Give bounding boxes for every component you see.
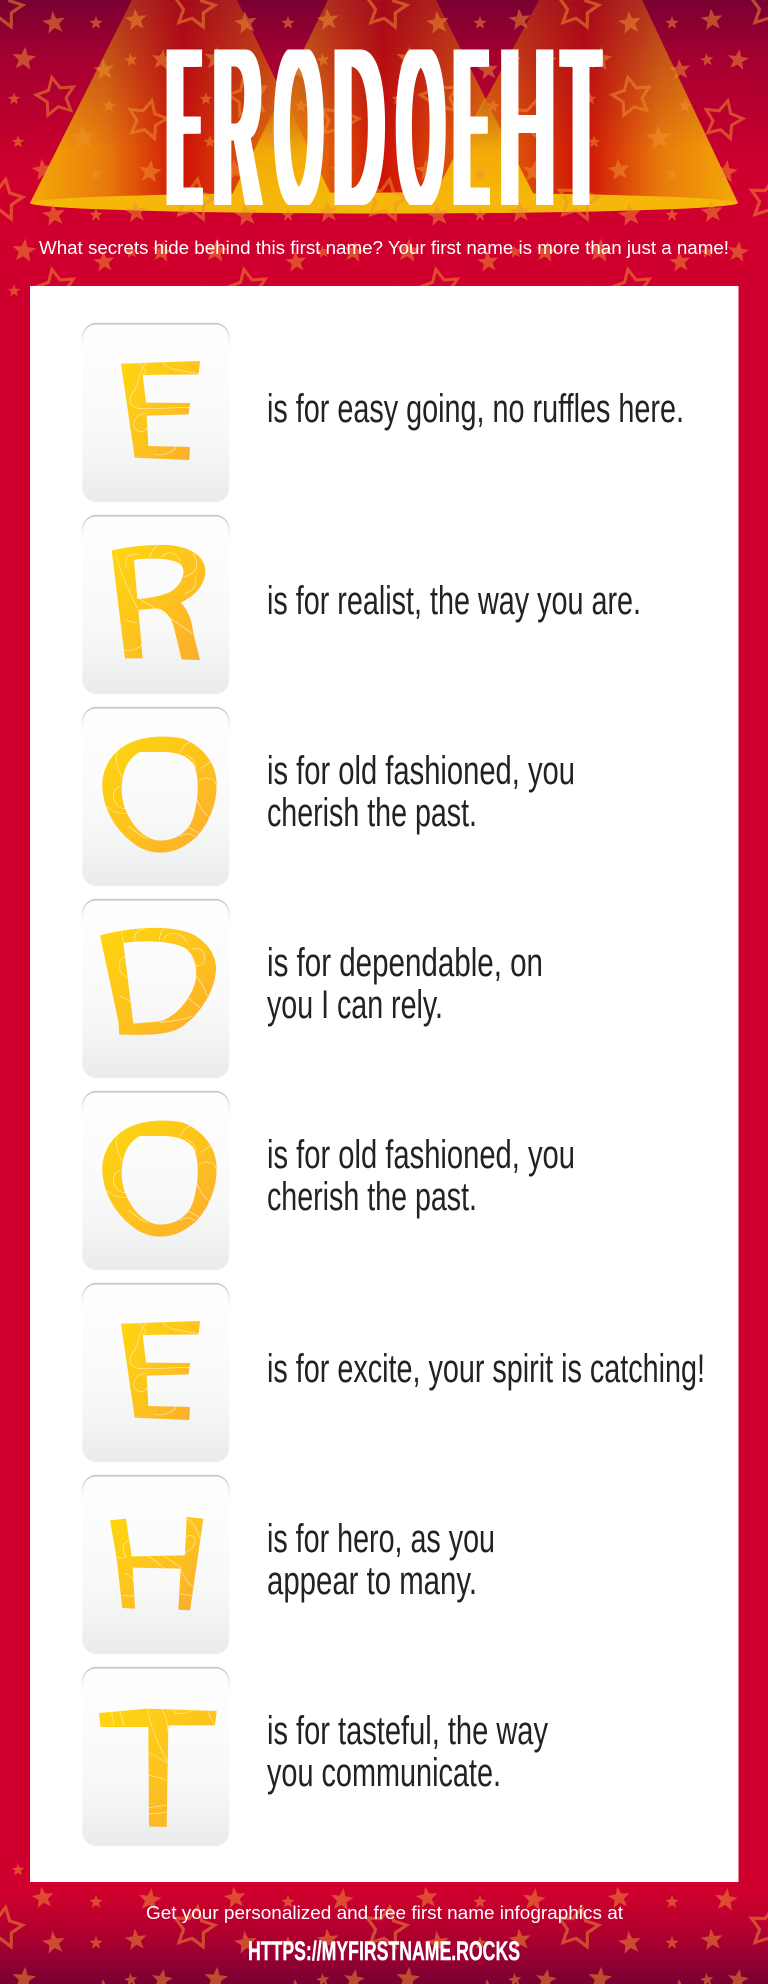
row: letter E, excite [82,1283,705,1462]
star pattern, top band [0,0,768,302]
caption: tasteful: you communicate. [267,1751,501,1795]
title [163,0,603,252]
tile: H [82,1475,229,1654]
title: O [392,0,437,252]
title: T [558,0,592,252]
caption: old fashioned: cherish the past. [267,791,477,835]
white content panel [30,286,738,1882]
row: letter R, realist [82,515,641,694]
caption: dependable: is for dependable, on [267,941,543,985]
caption: old fashioned: is for old fashioned, you [267,1133,575,1177]
tile: O [82,707,229,886]
subtitle: What secrets hide behind this first name? Your first name is more than just a name! [39,238,729,258]
caption: old fashioned [267,1133,575,1219]
row: letter H, hero [82,1475,495,1654]
caption: old fashioned: is for old fashioned, you [267,749,575,793]
title: D [329,0,377,252]
title: E [450,0,479,252]
star pattern, bottom band [0,1856,768,1984]
caption: dependable: you I can rely. [267,983,443,1027]
row: letter O, old fashioned [82,1091,575,1270]
row: letter E, easy going [82,323,684,502]
row: letter T, tasteful [82,1667,548,1846]
caption: tasteful [267,1709,548,1795]
tile: T [82,1667,229,1846]
tile: D [82,899,229,1078]
title: H [495,0,549,252]
footer line: Get your personalized and free first name infographics at [146,1902,623,1923]
caption: old fashioned: cherish the past. [267,1175,477,1219]
title: O [270,0,315,252]
tile: E [82,323,229,502]
caption: tasteful: is for tasteful, the way [267,1709,548,1753]
footer url: HTTPS://MYFIRSTNAME.ROCKS [248,1936,520,1966]
row: letter O, old fashioned [82,707,575,886]
title: E [163,0,192,252]
caption: dependable [267,941,543,1027]
tile: R [82,515,229,694]
title: R [209,0,255,252]
tile: E [82,1283,229,1462]
row: letter D, dependable [82,899,543,1078]
caption: hero [267,1517,495,1603]
spotlight cones [30,0,738,214]
caption: hero: appear to many. [267,1559,477,1603]
tile: O [82,1091,229,1270]
caption: hero: is for hero, as you [267,1517,495,1561]
caption: old fashioned [267,749,575,835]
